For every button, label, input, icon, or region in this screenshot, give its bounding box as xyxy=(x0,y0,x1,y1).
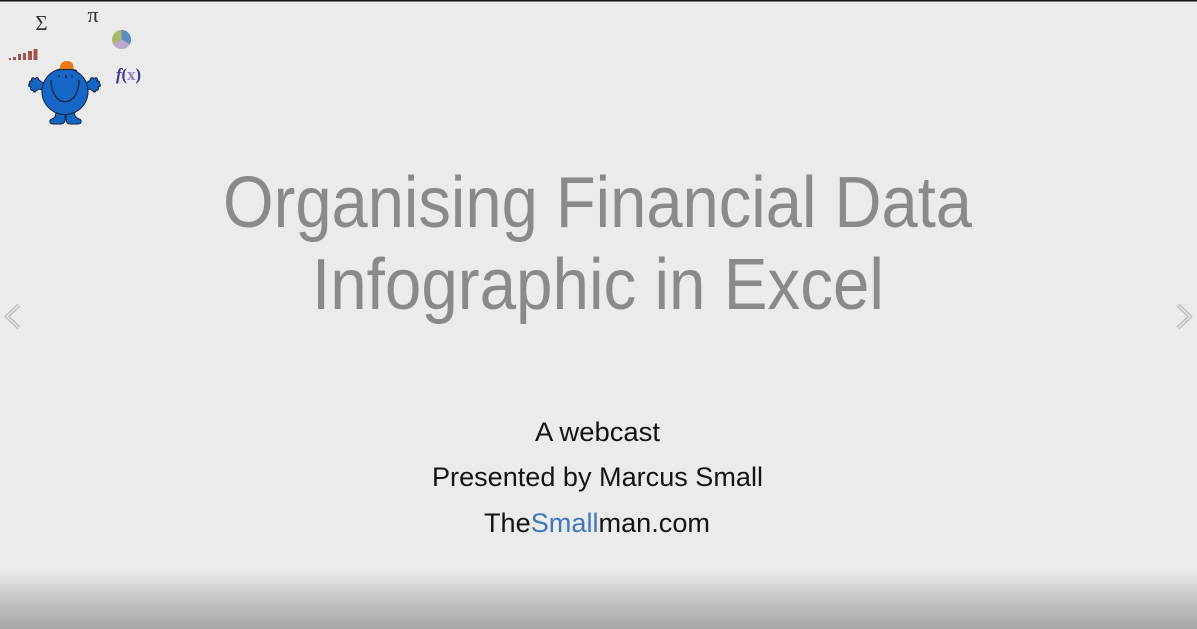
subtitle: presenter: Presented by Marcus Small xyxy=(432,462,763,492)
title xyxy=(223,163,973,325)
smile xyxy=(51,80,79,102)
arrow: next xyxy=(1178,305,1190,328)
eyes xyxy=(59,75,72,78)
arrow: previous xyxy=(7,305,19,328)
title line 2: Infographic in Excel xyxy=(312,245,884,325)
subtitle: webcast: A webcast xyxy=(535,417,660,447)
feet xyxy=(50,110,81,124)
icon: mascot with floating maths symbols xyxy=(9,2,141,124)
icon: function symbol: f(x) xyxy=(116,65,141,84)
icon: round blue character xyxy=(29,61,100,124)
subtitle block xyxy=(432,417,763,538)
title line 1: Organising Financial Data xyxy=(223,163,973,243)
body xyxy=(42,68,88,114)
subtitle: website: TheSmallman.com xyxy=(484,508,710,538)
icon: pie chart xyxy=(112,30,131,49)
icon: sigma: Σ xyxy=(35,11,48,35)
icon: pi: π xyxy=(87,2,99,27)
hat xyxy=(60,61,74,70)
arms xyxy=(29,78,100,92)
icon: bar signal xyxy=(9,49,38,60)
